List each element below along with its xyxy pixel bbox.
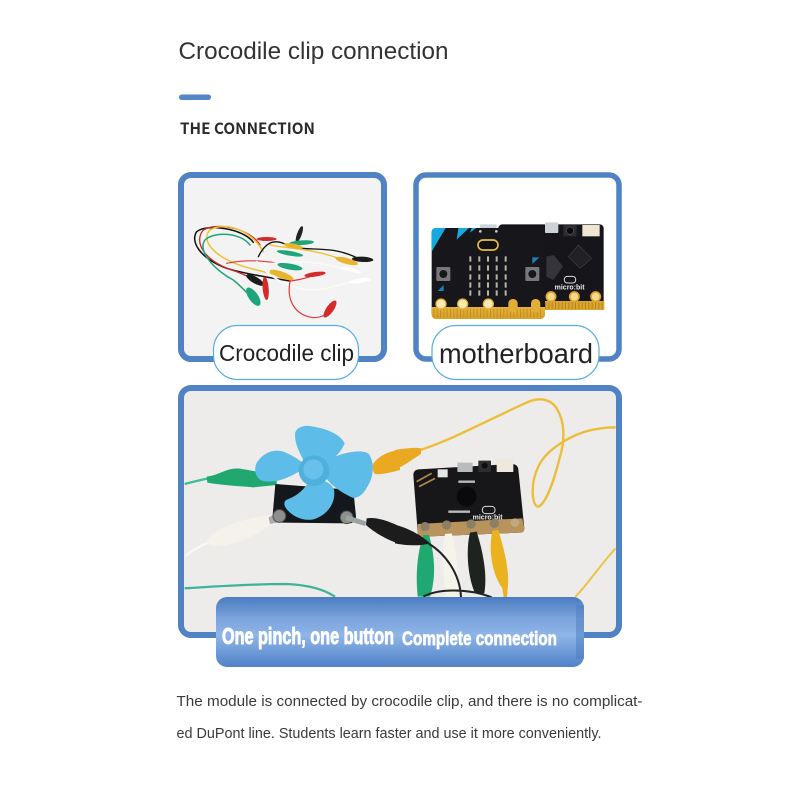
- title: Crocodile clip connection: [178, 38, 448, 65]
- photo: crocodile clip wires: [195, 225, 373, 319]
- label: crocodile clip: Crocodile clip: [219, 340, 354, 366]
- fan module board: [273, 484, 356, 523]
- orange clip tip: [395, 448, 421, 469]
- subheading: THE CONNECTION: [180, 117, 315, 139]
- fan: [255, 426, 373, 520]
- banner text: complete connection: Complete connection: [402, 629, 557, 650]
- yellow wire: [420, 399, 616, 507]
- black clip: [468, 532, 485, 593]
- banner text: one pinch: One pinch, one button: [222, 623, 394, 649]
- panel: motherboard: [416, 175, 619, 359]
- photo: micro:bit and right wires: micro:bit: [473, 514, 503, 521]
- photo: fan module and left clips: [185, 426, 400, 597]
- micro:bit board: [413, 464, 524, 537]
- LED grid: [469, 256, 507, 296]
- banner: [216, 597, 584, 667]
- white clip: [443, 533, 459, 597]
- photo: micro:bit boards: micro:bit: [555, 285, 585, 292]
- title accent bar: [179, 94, 211, 100]
- panel: connection photo: [181, 388, 619, 635]
- label: motherboard: motherboard: [439, 338, 593, 369]
- back board: [498, 224, 604, 309]
- front board: [480, 224, 497, 231]
- yellow clip: [491, 530, 508, 597]
- body text: [176, 693, 642, 742]
- photo: micro:bit and right wires: [395, 399, 616, 597]
- green clip: [417, 535, 434, 597]
- black clip from fan and wire: [395, 525, 430, 545]
- green clip: [207, 469, 277, 487]
- white clip: [207, 515, 273, 546]
- clips: [243, 225, 373, 319]
- label: motherboard: [432, 326, 599, 380]
- panel: crocodile clip: [181, 175, 384, 359]
- photo: micro:bit boards: [432, 222, 604, 319]
- body text: The module is connected by crocodile clip, and there is no complicat-: [176, 693, 642, 710]
- label: crocodile clip: [214, 326, 358, 380]
- body text: ed DuPont line. Students learn faster and use it more conveniently.: [176, 725, 602, 742]
- black clip body: [366, 518, 400, 544]
- orange clip body: [373, 450, 400, 474]
